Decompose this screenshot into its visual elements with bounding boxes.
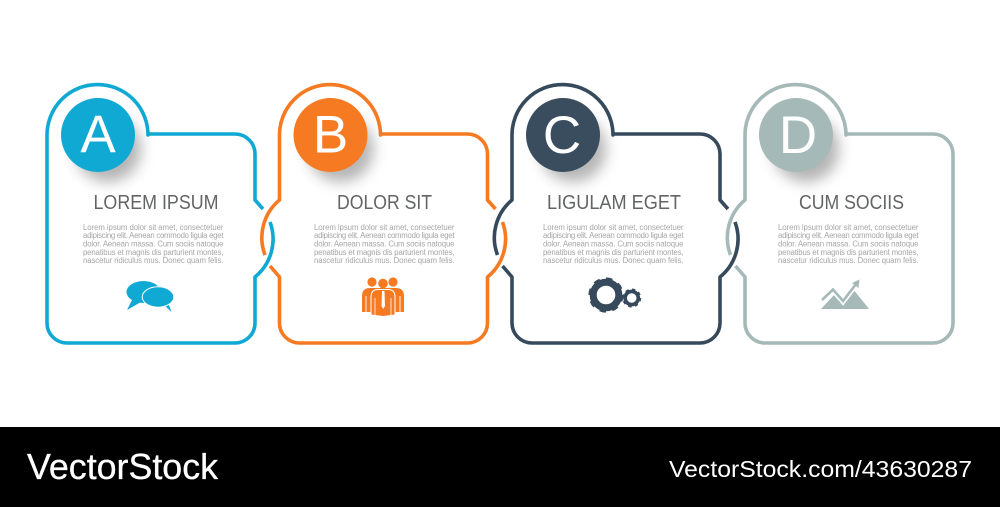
text block D: dolor. Aenean massa. Cum sociis natoque (778, 240, 918, 248)
text block B: penatibus et magnis dis parturient montes, (314, 248, 454, 257)
text block C: Lorem ipsum dolor sit amet, consectetuer (543, 223, 684, 232)
text block C: dolor. Aenean massa. Cum sociis natoque (543, 240, 684, 248)
text block B (314, 223, 455, 265)
text block D: nascetur ridiculus mus. Donec quam felis. (778, 256, 918, 265)
icon: team of people (362, 277, 404, 316)
panel: B (262, 85, 506, 343)
outline D (727, 85, 953, 343)
text block A: penatibus et magnis dis parturient montes, (83, 248, 224, 257)
heading A: LOREM IPSUM (94, 192, 218, 214)
panel: D (727, 85, 953, 343)
text block A: adipiscing elit. Aenean commodo ligula eget (83, 231, 224, 240)
panel: C (494, 85, 738, 343)
footer brand: VectorStock (27, 446, 219, 487)
badge D (759, 98, 839, 182)
badge C (526, 98, 606, 182)
text block A: dolor. Aenean massa. Cum sociis natoque (83, 240, 224, 248)
heading D: CUM SOCIIS (799, 192, 904, 214)
outline A (47, 85, 273, 343)
outline C (494, 85, 738, 343)
icon: chart mountains (820, 280, 869, 309)
footer url: VectorStock.com/43630287 (669, 456, 972, 482)
text block C (543, 223, 684, 265)
text block C: adipiscing elit. Aenean commodo ligula eget (543, 231, 684, 240)
badge B: B (313, 106, 348, 164)
icon: gears (590, 279, 640, 311)
text block B: dolor. Aenean massa. Cum sociis natoque (314, 240, 454, 248)
text block B: Lorem ipsum dolor sit amet, consectetuer (314, 223, 455, 232)
text block A (83, 223, 224, 265)
text block B: nascetur ridiculus mus. Donec quam felis. (314, 256, 454, 265)
text block D: adipiscing elit. Aenean commodo ligula eget (778, 231, 919, 240)
text block D (778, 223, 919, 265)
badge A: A (80, 105, 116, 164)
outline B (262, 85, 506, 343)
text block D: penatibus et magnis dis parturient montes, (778, 248, 918, 257)
icon: speech bubbles (126, 281, 174, 312)
badge A (61, 98, 141, 182)
text block D: Lorem ipsum dolor sit amet, consectetuer (778, 223, 919, 232)
panel: A (47, 85, 273, 343)
heading B: DOLOR SIT (337, 192, 432, 214)
heading C: LIGULAM EGET (547, 192, 681, 214)
badge B (294, 98, 374, 182)
text block C: nascetur ridiculus mus. Donec quam felis. (543, 256, 684, 265)
badge D: D (779, 106, 817, 165)
text block B: adipiscing elit. Aenean commodo ligula eget (314, 231, 455, 240)
footer band (0, 427, 1000, 507)
text block A: nascetur ridiculus mus. Donec quam felis. (83, 256, 224, 265)
text block A: Lorem ipsum dolor sit amet, consectetuer (83, 223, 224, 232)
badge C: C (543, 106, 581, 165)
text block C: penatibus et magnis dis parturient montes, (543, 248, 684, 257)
